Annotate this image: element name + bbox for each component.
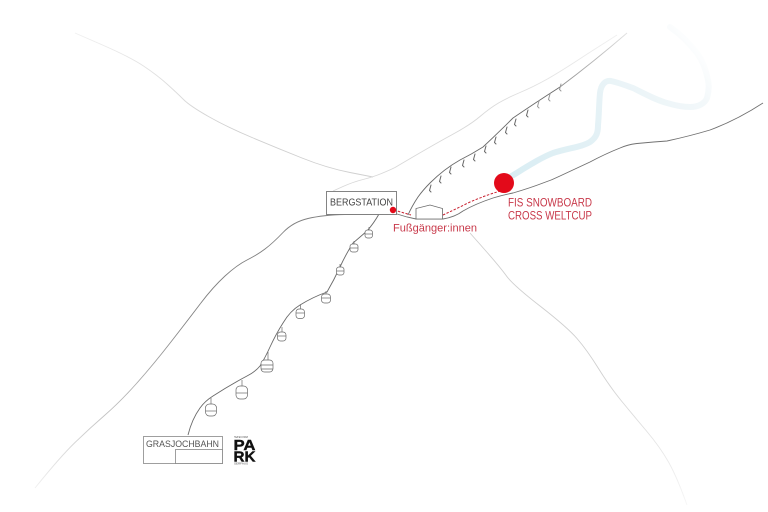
cabin 5 — [296, 305, 304, 318]
logo: Park: SERFAUS — [234, 461, 248, 465]
label: FIS Snowboard Cross Weltcup: CROSS WELTCUP — [508, 210, 592, 222]
logo: Park: RK — [234, 448, 256, 466]
label: pedestrians: Fußgänger:innen — [393, 223, 477, 235]
station box: Grasjochbahn: GRASJOCHBAHN — [146, 439, 219, 450]
logo: Park: SNOW — [234, 435, 249, 439]
pedestrian route dotted — [394, 190, 504, 215]
label: FIS Snowboard Cross Weltcup — [508, 198, 592, 222]
logo: Park — [234, 435, 256, 466]
chairlift line — [408, 33, 627, 215]
station box: Bergstation: BERGSTATION — [330, 198, 393, 209]
logo: Park: PA — [234, 437, 256, 454]
gondola cabins — [206, 227, 372, 416]
piste: snowboard cross course — [510, 27, 709, 177]
terrain line: main ridge with station — [35, 103, 763, 488]
cabin 2 — [236, 380, 248, 399]
station box: Grasjochbahn — [144, 436, 222, 464]
terrain line: upper left ridge — [75, 33, 373, 177]
cabin 9 — [365, 227, 372, 238]
station box: Bergstation — [326, 192, 396, 214]
terrain line: lower right slope — [470, 233, 687, 505]
cabin 6 — [322, 291, 330, 303]
chairlift hangers — [430, 84, 561, 192]
marker: pedestrian start — [390, 207, 396, 213]
marker: event location — [494, 173, 514, 193]
gondola line — [188, 214, 379, 435]
cabin 7 — [336, 264, 344, 275]
terrain line: upper ridge — [333, 35, 617, 191]
building: lodge — [416, 205, 442, 219]
cabin 1 — [206, 398, 216, 416]
label: FIS Snowboard Cross Weltcup: FIS SNOWBOARD — [508, 198, 592, 210]
cabin 8 — [350, 241, 358, 252]
cabin 4 — [278, 327, 286, 341]
cabin 3 — [261, 352, 273, 372]
